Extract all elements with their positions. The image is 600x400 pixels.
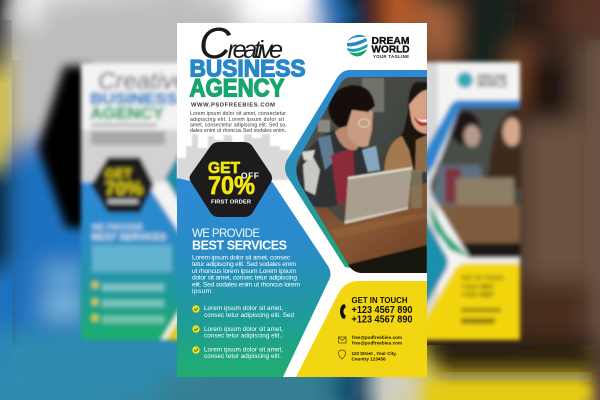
left blurred flyer: Creative <box>98 68 187 95</box>
photo: two people at a laptop <box>285 75 427 275</box>
icon: pin <box>338 350 346 359</box>
intro text <box>190 111 287 134</box>
GET: GET <box>208 160 240 177</box>
services paragraph: Lorem ipsum dolor sit amet, consec <box>192 254 291 262</box>
bullet 1: consec tetur adipiscing elit. Sed <box>204 312 294 319</box>
photo: glass on table <box>411 170 422 208</box>
heading: AGENCY: AGENCY <box>190 74 285 102</box>
white gap below the band <box>340 267 427 283</box>
bullet 2 <box>192 325 283 340</box>
main flyer <box>177 23 427 377</box>
services paragraph: ipsum <box>192 288 212 295</box>
right blurred flyer: WORLD <box>477 80 507 89</box>
title: Creative: Creative <box>199 19 283 68</box>
photo: man <box>296 85 380 208</box>
contact details: free@psdfreebies.com <box>352 340 402 346</box>
yellow contact panel <box>296 281 427 377</box>
logo tagline: YOUR TAGLINE <box>373 54 409 59</box>
photo: woman <box>384 82 427 172</box>
left blurred flyer: 70% <box>105 179 143 200</box>
bullet 1 <box>192 305 294 319</box>
icon: mail <box>338 337 346 343</box>
logo name: DREAM <box>372 36 410 47</box>
right blurred flyer <box>423 62 521 340</box>
bullet 3: Lorem ipsum dolor sit amet, <box>204 346 283 354</box>
services paragraph: elit. Sed sodales enim ut rhoncus lorem <box>192 282 300 288</box>
photo: table <box>307 183 427 266</box>
left blurred flyer: AGENCY <box>90 104 165 123</box>
icon: globe <box>346 35 368 56</box>
heading: BUSINESS: BUSINESS <box>190 56 306 82</box>
left blurred flyer: BEST SERVICES <box>92 232 166 242</box>
bullet 2: consec tetur adipiscing elit.. <box>204 332 283 340</box>
icon: phone <box>340 304 346 319</box>
right blurred flyer: GET IN TOUCH <box>461 276 504 282</box>
blue-green services panel <box>177 178 330 377</box>
bottom yellow background strip <box>425 374 590 400</box>
bullet 3: consec tetur adipiscing elit. <box>204 353 281 360</box>
phone number 2: +123 4567 890 <box>352 314 413 326</box>
bullet list <box>192 305 294 360</box>
get in touch: GET IN TOUCH <box>352 295 408 305</box>
services paragraph <box>192 254 300 295</box>
services heading: BEST SERVICES <box>192 238 287 252</box>
emails: free@psdfreebies.com <box>352 335 402 340</box>
left blurred flyer <box>81 63 187 340</box>
services paragraph: ut rhoncus lorem ipsum Lorem ipsum <box>192 268 296 275</box>
phone number 1: +123 4567 890 <box>352 305 413 316</box>
right blurred flyer: DREAM <box>477 73 507 82</box>
right blurred flyer: +123 4567 <box>461 292 494 299</box>
services heading <box>192 228 287 252</box>
address: 123 Street , Your City, <box>352 351 396 356</box>
left blurred flyer: BUSINESS <box>90 91 178 108</box>
contact details <box>338 295 413 362</box>
70%: 70% <box>208 172 255 200</box>
logo <box>346 35 410 59</box>
services paragraph: dolor sit amet, consec tetur adipiscing <box>192 274 297 282</box>
intro text: Lorem ipsum dolor sit amet, consectetur <box>190 111 286 117</box>
left blurred flyer: GET <box>105 166 132 181</box>
website: WWW.PSDFREEBIES.COM <box>191 102 275 108</box>
OFF: OFF <box>241 170 259 180</box>
bullet 3 <box>192 346 283 360</box>
right blurred flyer: +123 4567 <box>461 284 494 291</box>
photo wall <box>296 77 427 187</box>
services heading: WE PROVIDE <box>192 228 260 240</box>
city skyline backdrop <box>177 134 290 180</box>
bullet 1: Lorem ipsum dolor sit amet, <box>204 305 283 312</box>
flyer paper <box>177 23 427 377</box>
FIRST ORDER: FIRST ORDER <box>211 200 252 206</box>
photo frame band <box>285 70 427 273</box>
intro text: amet, consectetur adipiscing elit. Sed so- <box>190 122 287 128</box>
intro text: dales enim ut rhoncus.Sed sodales enim. <box>190 128 286 134</box>
logo: WORLD <box>372 44 410 56</box>
contact details: Country 123456 <box>352 356 386 362</box>
bullet 2: Lorem ipsum dolor sit amet, <box>204 326 283 333</box>
left blurred flyer: WE PROVIDE <box>92 223 144 232</box>
offer hexagon badge <box>190 142 272 217</box>
intro text: adipiscing elit. Lorem ipsum dolor sit <box>190 117 285 123</box>
services paragraph: tetur adipiscing elit. Sed sodales enim <box>192 261 296 268</box>
dark shadow behind left flyer <box>38 66 90 228</box>
photo: laptop <box>327 167 412 224</box>
